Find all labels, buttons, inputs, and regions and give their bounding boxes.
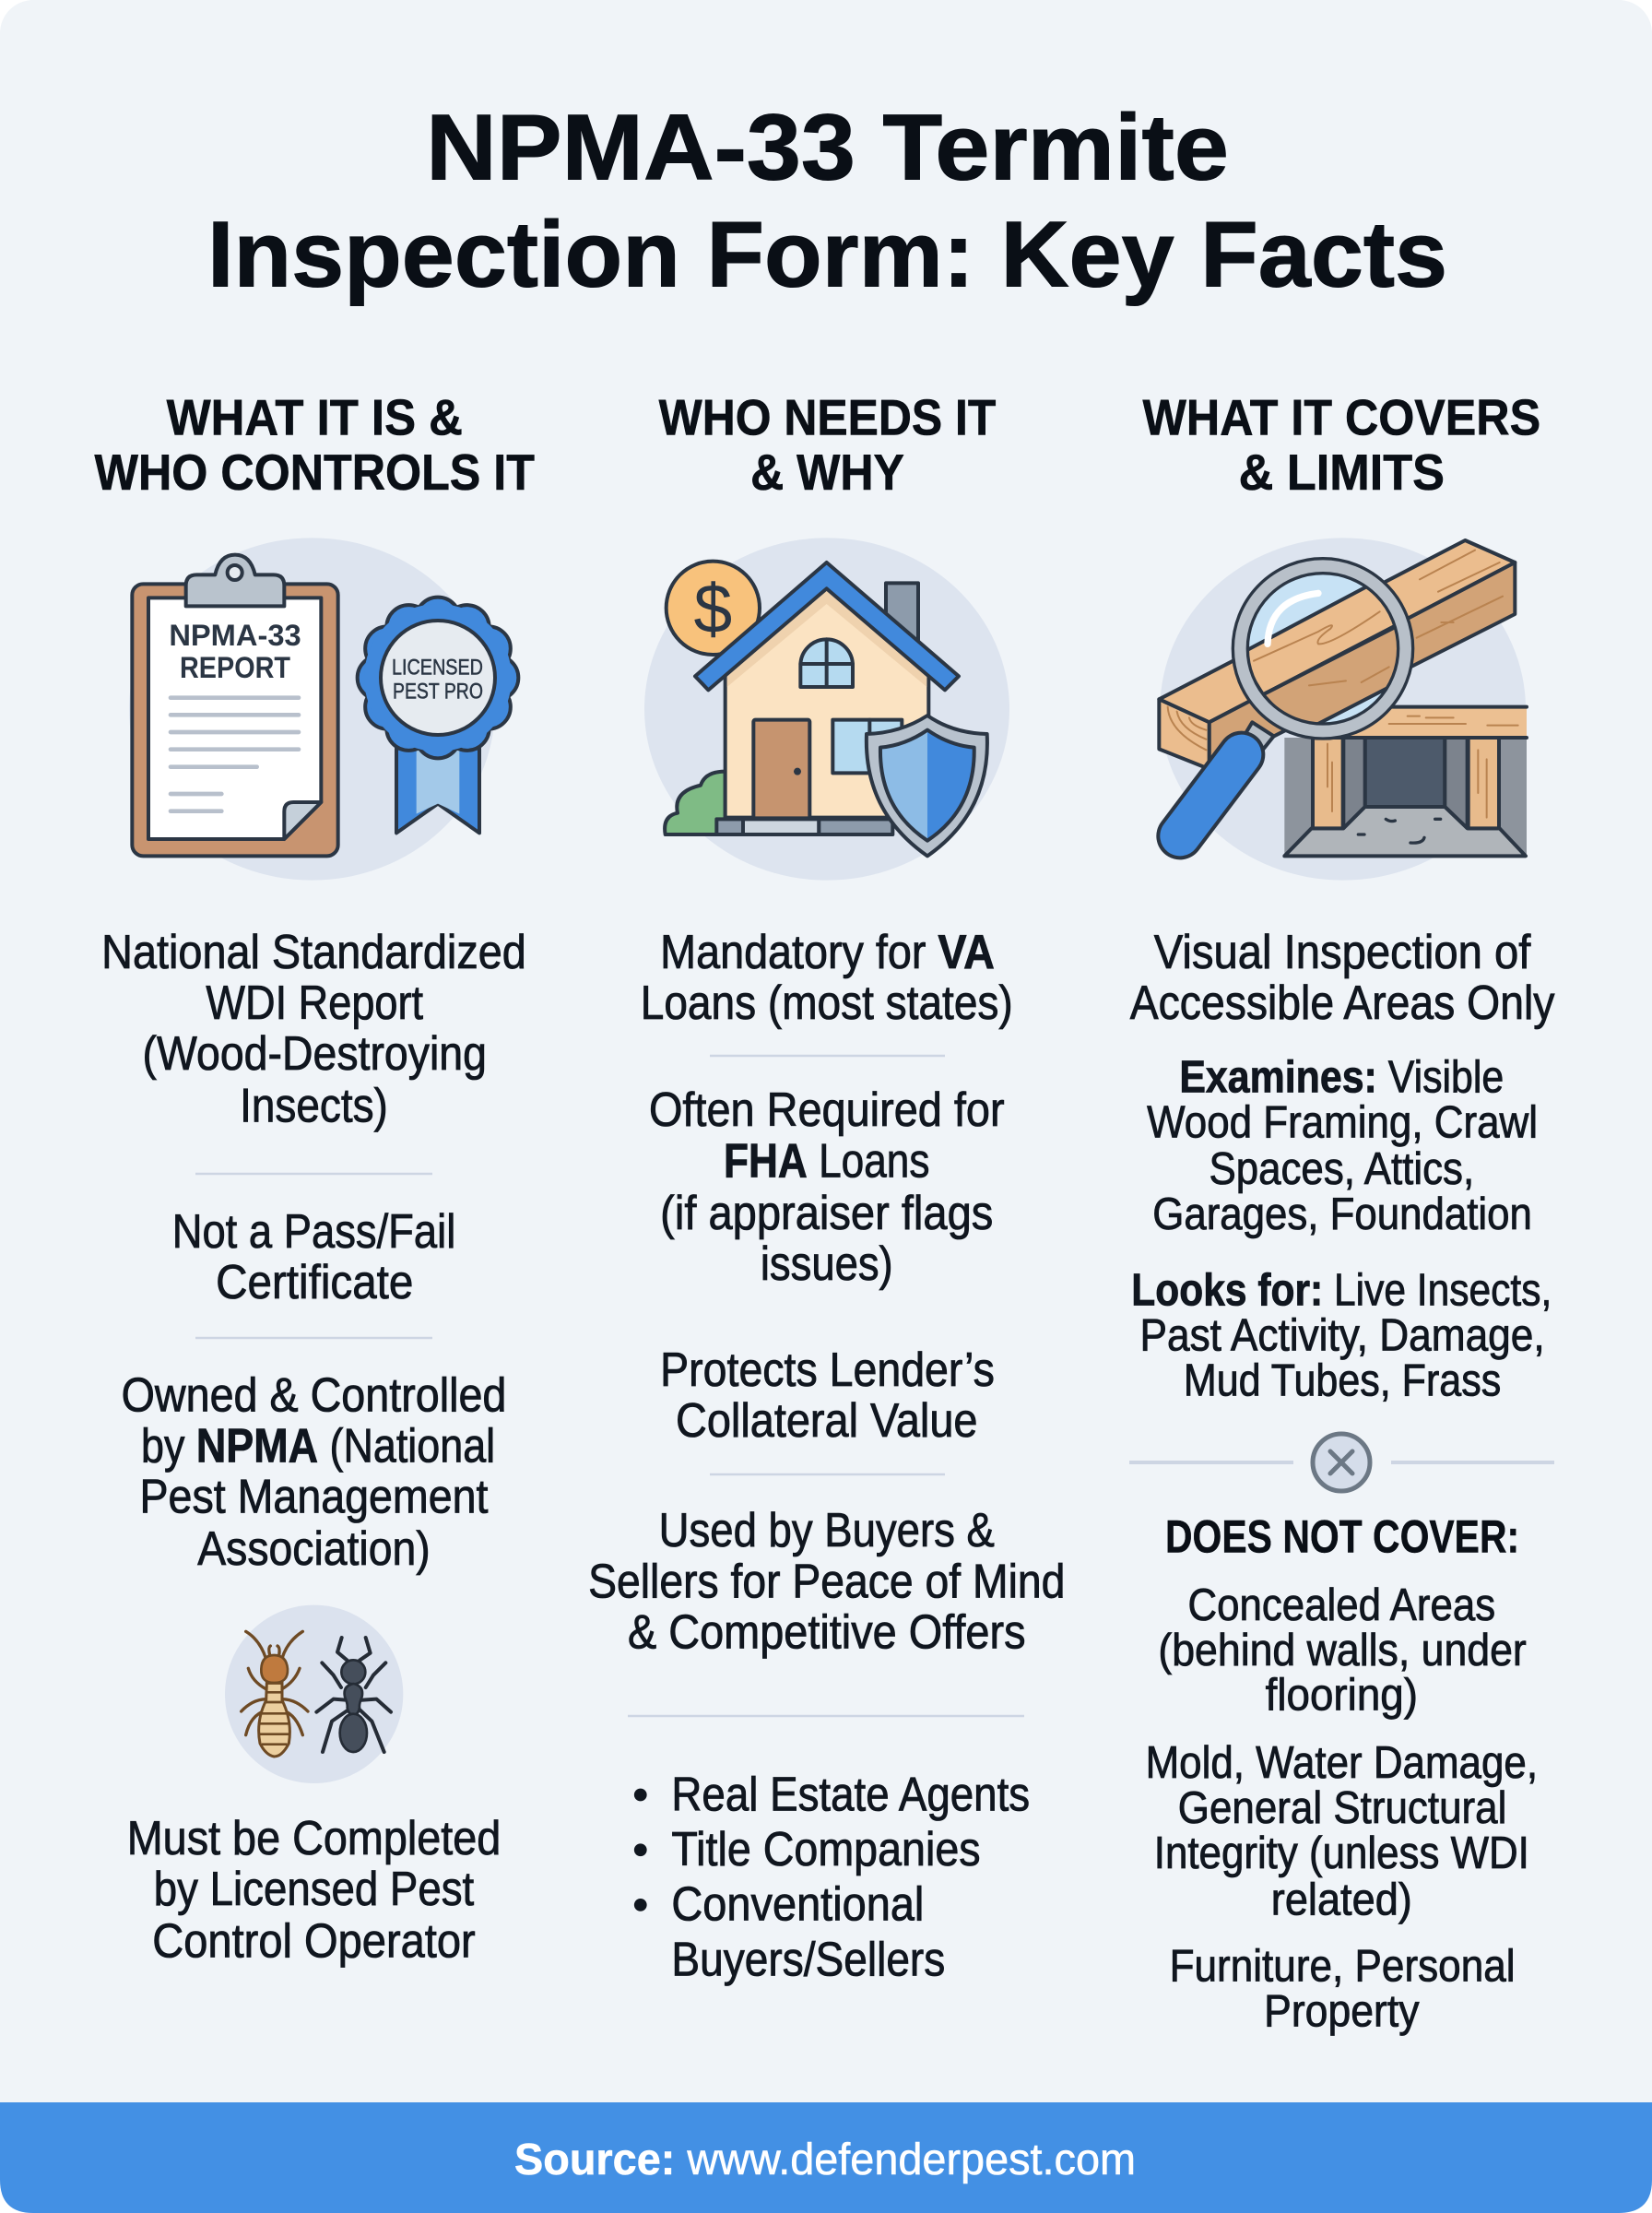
icon: house with coin and shield: $ xyxy=(693,570,732,647)
text: furniture and personal property: Furniture, Personal xyxy=(1170,1942,1516,1992)
text: owned and controlled by NPMA: Owned & Controlled xyxy=(122,1368,506,1422)
text: examines xyxy=(1147,1052,1538,1239)
heading: what it is: WHAT IT IS & xyxy=(167,388,463,445)
text: used by buyers and sellers: Used by Buyers & xyxy=(659,1504,995,1557)
text: furniture and personal property xyxy=(1170,1942,1516,2037)
text: often required for FHA loans: Often Required for xyxy=(649,1083,1005,1137)
list: other users: Conventional xyxy=(671,1878,924,1932)
text: must be completed by licensed operator: Control Operator xyxy=(152,1915,476,1969)
icon: clipboard report and licensed badge: NPMA-33 xyxy=(169,619,301,652)
icon: magnifier over wood beam and crawl space xyxy=(1159,538,1527,881)
panel: what it is and who controls it xyxy=(95,388,535,1969)
text: protects lender's collateral value xyxy=(660,1343,995,1448)
text: national standardized WDI report xyxy=(101,926,526,1133)
text: furniture and personal property: Property xyxy=(1264,1987,1420,2037)
heading: what it covers: & LIMITS xyxy=(1239,444,1445,501)
text: must be completed by licensed operator xyxy=(127,1812,501,1969)
text: protects lender's collateral value: Collateral Value xyxy=(676,1394,977,1448)
panel: what it covers and limits xyxy=(1129,388,1554,2037)
text: often required for FHA loans: issues) xyxy=(761,1237,893,1291)
icon: clipboard report and licensed badge: LICENSED xyxy=(392,656,483,680)
list: other users xyxy=(634,1768,1030,1986)
title xyxy=(207,96,1447,307)
icon: house with coin and shield xyxy=(644,538,1009,881)
text: mandatory for VA loans: Loans (most states) xyxy=(641,976,1013,1030)
footer: source bar xyxy=(0,2102,1652,2213)
icon: termite and ant xyxy=(225,1605,403,1783)
text: visual inspection of accessible areas only xyxy=(1130,926,1554,1030)
text: protects lender's collateral value: Protects Lender’s xyxy=(660,1343,995,1397)
text: looks for: Mud Tubes, Frass xyxy=(1184,1355,1501,1405)
text: national standardized WDI report: National Standardized xyxy=(101,926,526,979)
text: mold and water damage: General Structural xyxy=(1178,1783,1506,1833)
text: not a pass/fail certificate: Not a Pass/Fail xyxy=(172,1205,455,1259)
text: often required for FHA loans xyxy=(649,1083,1005,1291)
text: owned and controlled by NPMA xyxy=(122,1368,506,1576)
title: NPMA-33 Termite xyxy=(426,96,1229,199)
text: concealed areas xyxy=(1158,1580,1527,1721)
text: mandatory for VA loans: Mandatory for VA xyxy=(660,926,995,979)
text: often required for FHA loans: FHA Loans xyxy=(724,1134,929,1188)
list: other users: Buyers/Sellers xyxy=(671,1933,945,1986)
text: national standardized WDI report: (Wood-Destroying xyxy=(143,1027,487,1081)
icon: clipboard report and licensed badge: PEST PRO xyxy=(393,680,483,704)
text: visual inspection of accessible areas only: Accessible Areas Only xyxy=(1130,976,1554,1030)
text: concealed areas: (behind walls, under xyxy=(1158,1626,1527,1675)
text: examines: Garages, Foundation xyxy=(1152,1189,1532,1239)
list: other users: Real Estate Agents xyxy=(671,1768,1030,1821)
heading: what it covers: WHAT IT COVERS xyxy=(1143,388,1540,445)
icon: x in circle xyxy=(1313,1434,1370,1491)
text: not a pass/fail certificate: Certificate xyxy=(216,1256,413,1309)
text: examines: Examines: Visible xyxy=(1179,1052,1504,1102)
heading: does not cover: DOES NOT COVER: xyxy=(1165,1509,1519,1562)
text: mold and water damage xyxy=(1146,1738,1538,1925)
text: examines: Spaces, Attics, xyxy=(1209,1144,1474,1194)
text: national standardized WDI report: WDI Report xyxy=(206,976,424,1030)
text: concealed areas: Concealed Areas xyxy=(1188,1580,1495,1630)
text: looks for: Looks for: Live Insects, xyxy=(1131,1266,1552,1316)
text: national standardized WDI report: Insects) xyxy=(240,1080,388,1133)
text: owned and controlled by NPMA: by NPMA (National xyxy=(141,1419,495,1473)
text: looks for: Past Activity, Damage, xyxy=(1139,1310,1545,1360)
text: owned and controlled by NPMA: Pest Management xyxy=(139,1470,489,1523)
heading: who needs it: WHO NEEDS IT xyxy=(659,388,997,445)
text: owned and controlled by NPMA: Association) xyxy=(197,1522,431,1576)
text: visual inspection of accessible areas only: Visual Inspection of xyxy=(1154,926,1531,979)
text: used by buyers and sellers: Sellers for Peace of Mind xyxy=(588,1555,1065,1608)
heading: what it is: WHO CONTROLS IT xyxy=(95,444,535,501)
text: concealed areas: flooring) xyxy=(1266,1671,1418,1721)
text: used by buyers and sellers xyxy=(588,1504,1065,1659)
text: often required for FHA loans: (if appraiser flags xyxy=(660,1187,993,1240)
heading: what it is xyxy=(95,388,535,501)
text: used by buyers and sellers: & Competitive Offers xyxy=(628,1605,1026,1659)
heading: what it covers xyxy=(1143,388,1540,501)
footer: source bar: Source: www.defenderpest.com xyxy=(514,2136,1136,2184)
text: must be completed by licensed operator: by Licensed Pest xyxy=(154,1863,475,1916)
heading: who needs it xyxy=(659,388,997,501)
text: mold and water damage: related) xyxy=(1271,1876,1412,1925)
panel: who needs it and why xyxy=(588,388,1065,1986)
text: mold and water damage: Integrity (unless WDI xyxy=(1154,1828,1529,1878)
icon: clipboard report and licensed badge: REPORT xyxy=(180,651,290,684)
title: Inspection Form: Key Facts xyxy=(207,204,1447,307)
text: must be completed by licensed operator: Must be Completed xyxy=(127,1812,501,1865)
text: looks for xyxy=(1131,1266,1552,1405)
text: mold and water damage: Mold, Water Damage, xyxy=(1146,1738,1538,1788)
heading: who needs it: & WHY xyxy=(750,444,904,501)
text: mandatory for VA loans xyxy=(641,926,1013,1030)
icon: clipboard report and licensed badge xyxy=(129,538,518,881)
text: examines: Wood Framing, Crawl xyxy=(1147,1097,1538,1147)
list: other users: Title Companies xyxy=(671,1823,981,1876)
text: not a pass/fail certificate xyxy=(172,1205,455,1309)
